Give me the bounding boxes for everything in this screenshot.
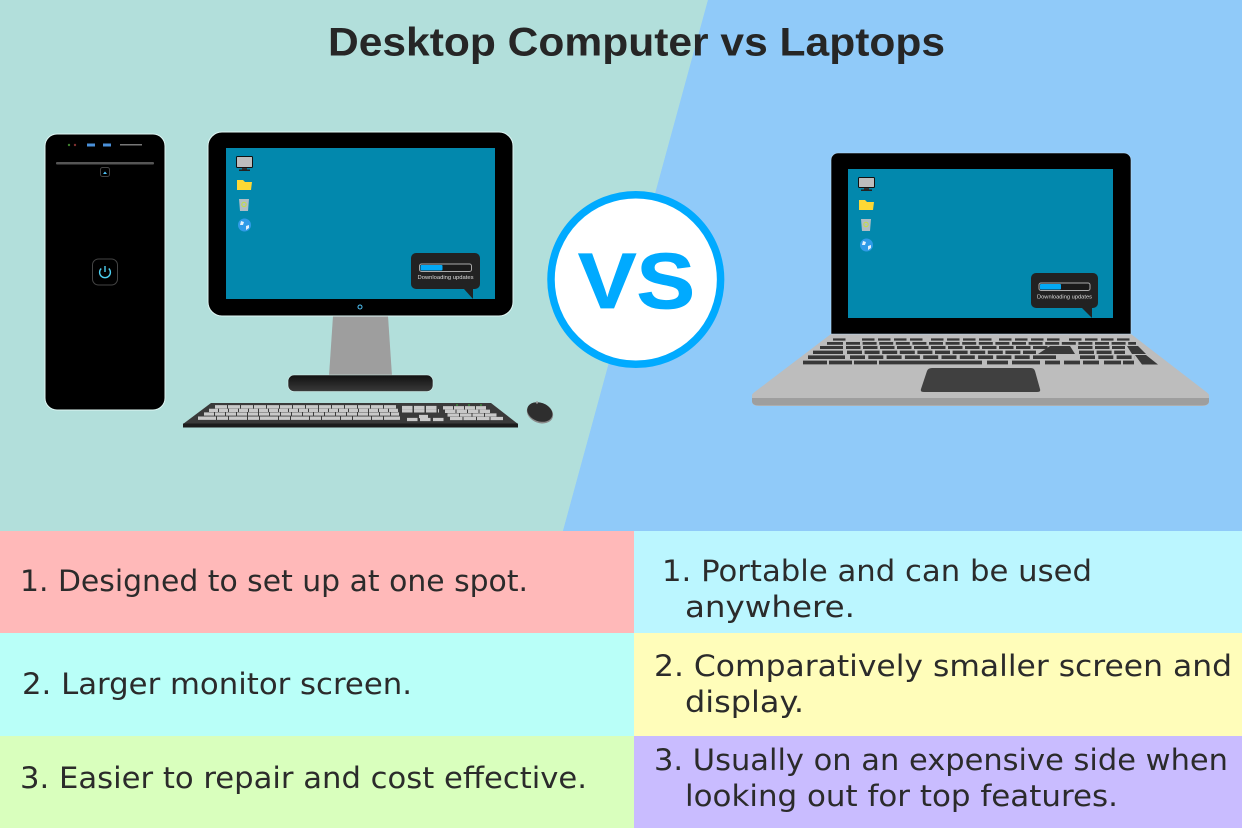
panel: desktop point 1: 1. Designed to set up at one spot. [20,564,528,598]
background: laptop side [563,0,1242,531]
panel: laptop point 3: 3. Usually on an expensive side when [654,743,1228,777]
icon: monitor stand [329,316,392,376]
icon: monitor base [288,375,433,392]
panel: laptop point 1: 1. Portable and can be used [662,554,1092,588]
panel: laptop point 3: looking out for top features. [685,779,1118,813]
laptop update bubble [1031,273,1098,318]
panel: laptop point 2 [634,633,1242,736]
panel: laptop point 2: display. [685,685,804,719]
laptop desktop icons [858,178,874,252]
panel: desktop point 3 [0,736,634,828]
VS badge: VS [578,236,695,325]
VS badge [551,195,721,364]
icon: laptop [752,153,1209,406]
panel: desktop point 3: 3. Easier to repair and cost effective. [20,761,587,795]
panel: laptop point 3 [634,736,1242,828]
title: Desktop Computer vs Laptops [328,20,945,64]
update bubble: Downloading updates [418,275,474,281]
laptop keyboard [803,340,1136,362]
laptop update bubble: Downloading updates [1037,294,1092,300]
panel: laptop point 1: anywhere. [685,590,855,624]
desktop icons on monitor [236,156,252,232]
panel: desktop point 2: 2. Larger monitor screen. [22,667,412,701]
panel: laptop point 1 [634,531,1242,633]
touchpad [921,368,1040,392]
update bubble [411,253,480,299]
panel: desktop point 1 [0,531,634,633]
panel: laptop point 2: 2. Comparatively smaller screen and [654,649,1232,683]
panel: desktop point 2 [0,633,634,736]
icon: mouse [524,399,556,427]
background: desktop side [0,0,708,531]
icon: monitor [208,132,513,316]
icon: keyboard [183,403,518,428]
icon: desktop tower [45,134,165,410]
